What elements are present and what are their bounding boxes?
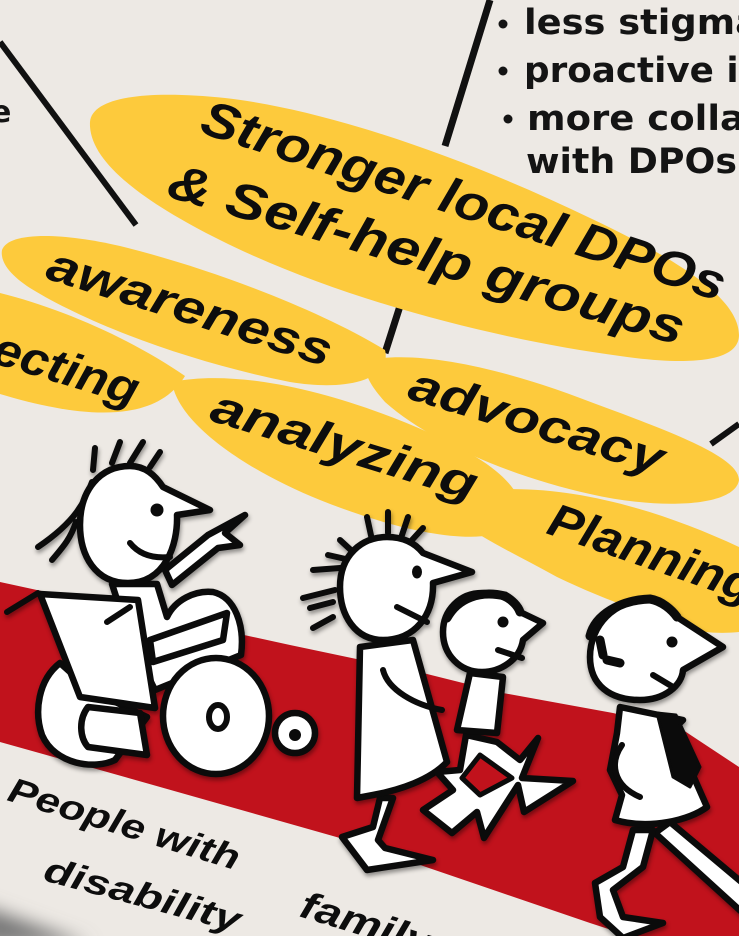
caption: People with disability (4, 770, 247, 936)
mouth (653, 675, 673, 687)
eye (412, 566, 422, 578)
eye (498, 616, 508, 628)
heading: self-help groups: & Self-help groups (162, 153, 691, 356)
pointing arm (165, 515, 245, 585)
caster wheel (275, 713, 315, 753)
mouth (397, 607, 427, 622)
yellow cloud: advocacy (366, 357, 739, 504)
bullet list: outcomes (498, 3, 739, 182)
eye (150, 504, 164, 516)
back leg (655, 822, 739, 915)
wheelchair back panel (40, 594, 155, 708)
red carpet band (0, 582, 739, 936)
hair (590, 599, 677, 663)
label: advocacy: advocacy (403, 357, 674, 486)
hair (303, 512, 423, 628)
figure: man walking (590, 599, 739, 936)
mouth (498, 650, 522, 658)
connector line: upper centre (385, 0, 490, 353)
head (340, 537, 472, 640)
label: awareness: awareness (41, 237, 339, 377)
caption: People with disability: disability (40, 850, 247, 936)
leg (81, 707, 147, 755)
yellow cloud: awareness (2, 236, 386, 385)
yellow cloud: analyzing (172, 378, 522, 537)
corner shadow (0, 905, 90, 936)
figure: person in wheelchair (7, 442, 315, 774)
label: analyzing: analyzing (205, 379, 485, 510)
yellow cloud: stronger local DPOs and self-help groups (90, 89, 739, 361)
dress (357, 640, 447, 798)
yellow cloud: planning (480, 489, 739, 633)
arm (383, 670, 442, 710)
eye (666, 636, 678, 648)
head (590, 600, 723, 700)
figure: woman walking (303, 512, 472, 870)
connector line: right (711, 424, 739, 444)
head (80, 466, 210, 583)
main wheel (163, 658, 269, 774)
connector line: upper left (0, 42, 136, 225)
hair (447, 594, 520, 618)
torso (610, 707, 707, 824)
heading: Stronger local DPOs: Stronger local DPOs (195, 89, 733, 312)
caption: People with disability: People with (4, 770, 245, 878)
mouth (130, 543, 170, 557)
torso (457, 673, 503, 733)
yellow cloud: collecting (0, 293, 185, 415)
tie (657, 713, 700, 787)
forearm (150, 613, 227, 662)
legs (423, 735, 573, 838)
arm (615, 745, 640, 797)
rear wheel (38, 663, 147, 765)
head (443, 593, 543, 672)
torso and arm (112, 584, 242, 690)
front leg (342, 798, 433, 870)
front leg (595, 830, 663, 936)
bullet list: outcomes: with DPOs (526, 142, 737, 182)
bullet list: outcomes: more colla (527, 99, 739, 139)
hair (38, 442, 160, 560)
figure: child walking (423, 593, 573, 838)
red gap between legs (462, 755, 512, 795)
